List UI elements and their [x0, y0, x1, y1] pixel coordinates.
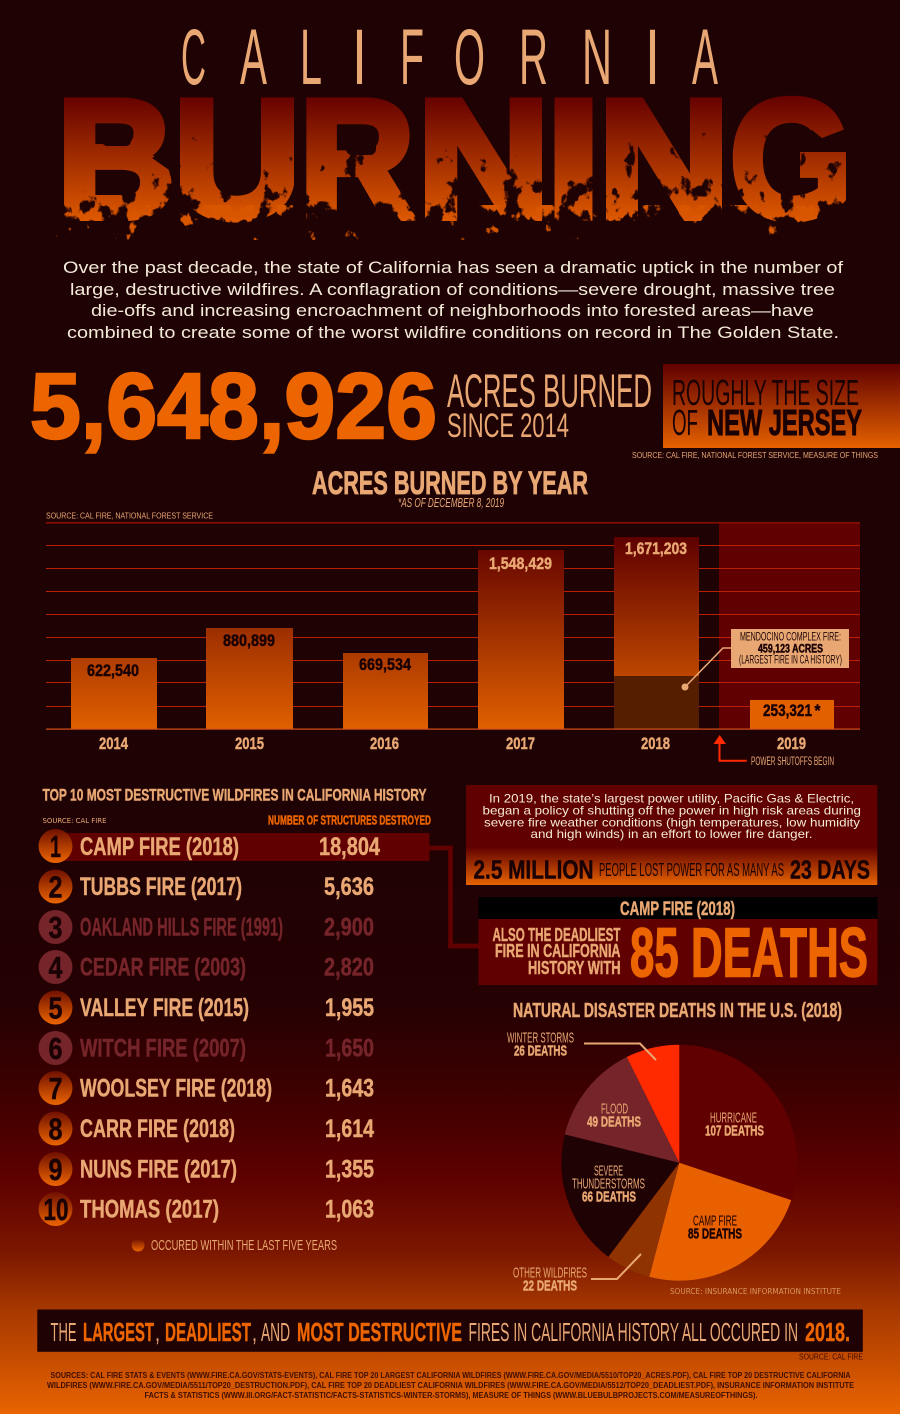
- bar chart: acres burned by year: 669,534: [359, 655, 411, 674]
- heading: acres burned by year: *AS OF DECEMBER 8, 2019: [398, 495, 504, 510]
- pie chart: natural disaster deaths: [561, 1045, 797, 1281]
- banner: largest, deadliest, most destructive: MOST DESTRUCTIVE: [297, 1317, 462, 1347]
- slice: severe thunderstorms: [561, 1134, 679, 1257]
- title: California: N: [582, 12, 612, 101]
- row 2: Tubbs Fire: 5,636: [324, 873, 374, 901]
- banner: largest, deadliest, most destructive: ,: [155, 1317, 160, 1347]
- callout: Mendocino Complex Fire: [682, 629, 849, 690]
- bar chart: acres burned by year: 1,671,203: [625, 539, 687, 558]
- bar chart: acres burned by year: 2014: [99, 734, 128, 753]
- row 8: Carr Fire: 1,614: [325, 1115, 374, 1143]
- bar chart: acres burned by year: *: [814, 701, 821, 720]
- slice: winter storms: [627, 1045, 679, 1163]
- label: winter storms: WINTER STORMS: [507, 1030, 574, 1046]
- title: California: O: [454, 12, 485, 101]
- slice: severe thunderstorms: THUNDERSTORMS: [572, 1176, 645, 1192]
- banner: largest, deadliest, most destructive: LARGEST: [83, 1317, 154, 1347]
- slice: severe thunderstorms: 66 DEATHS: [582, 1188, 636, 1206]
- label: other wildfires: OTHER WILDFIRES: [513, 1264, 587, 1282]
- sources footer: WILDFIRES (WWW.FIRE.CA.GOV/MEDIA/5511/TOP20_DESTRUCTION.PDF), CAL FIRE TOP 20 DEADLIEST CALIFORNIA WILDFIRES (WWW.FIRE.CA.GOV/MEDIA/5512/TOP20_DEADLIEST.PDF), INSURANCE INFORMATION INSTITUTE: [47, 1381, 855, 1390]
- banner: largest, deadliest, most destructive: ,: [252, 1317, 257, 1347]
- legend: occurred within last five years: [132, 1237, 337, 1254]
- column heading: structures destroyed: NUMBER OF STRUCTURES DESTROYED: [268, 814, 431, 828]
- bar chart: acres burned by year: [46, 522, 860, 753]
- title: California: R: [519, 12, 548, 101]
- row 2: Tubbs Fire: TUBBS FIRE (2017): [80, 873, 242, 901]
- panel: power shutoffs: and high winds) in an effort to lower fire danger.: [530, 827, 812, 841]
- source note: banner: SOURCE: CAL FIRE: [799, 1352, 863, 1362]
- row 10: Thomas: [38, 1192, 374, 1227]
- sources footer: [47, 1371, 855, 1400]
- headline stat: acres burned: ACRES BURNED: [447, 364, 652, 417]
- title: California: C: [181, 12, 206, 101]
- title: California: I: [645, 12, 660, 101]
- headline stat: acres burned: 5,648,926: [30, 354, 437, 458]
- banner: largest, deadliest, most destructive: THE: [50, 1317, 76, 1347]
- slice: hurricane: [679, 1045, 797, 1200]
- row 6: Witch Fire: WITCH FIRE (2007): [80, 1034, 246, 1062]
- slice: flood: FLOOD: [601, 1100, 628, 1118]
- title: California: [181, 12, 718, 101]
- bar chart: acres burned by year: 622,540: [87, 661, 139, 680]
- source note: chart: SOURCE: CAL FIRE, NATIONAL FOREST SERVICE: [46, 512, 213, 520]
- slice: flood: 49 DEATHS: [587, 1114, 641, 1130]
- row 9: Nuns Fire: 1,355: [325, 1156, 374, 1184]
- slice: camp fire: CAMP FIRE: [693, 1212, 737, 1230]
- headline stat: acres burned: [30, 354, 652, 458]
- row 5: Valley Fire: 5: [48, 990, 62, 1026]
- panel: power shutoffs: began a policy of shutting off the power in high risk areas during: [482, 804, 861, 818]
- bar chart: acres burned by year: 2018: [641, 734, 670, 753]
- heading: acres burned by year: ACRES BURNED BY YEAR: [312, 465, 588, 501]
- title: Burning: N: [598, 65, 730, 253]
- bar chart: acres burned by year: 253,321: [763, 701, 812, 720]
- panel: power shutoffs: In 2019, the state’s largest power utility, Pacific Gas & Electric,: [489, 792, 854, 806]
- label: other wildfires: [513, 1254, 641, 1294]
- row 7: Woolsey Fire: WOOLSEY FIRE (2018): [80, 1075, 272, 1103]
- sources footer: FACTS & STATISTICS (WWW.III.ORG/FACT-STATISTIC/FACTS-STATISTICS-WINTER-STORMS), MEASURE OF THINGS (WWW.BLUEBULBPROJECTS.COM/MEASUREOFTHINGS).: [144, 1391, 758, 1400]
- row 7: Woolsey Fire: [38, 1071, 374, 1106]
- row 10: Thomas: 10: [44, 1192, 68, 1227]
- row 1: Camp Fire: 18,804: [319, 833, 380, 861]
- heading: acres burned by year: [312, 465, 588, 510]
- banner: largest, deadliest, most destructive: AND: [261, 1317, 290, 1347]
- slice: other wildfires: [608, 1163, 679, 1277]
- slice: hurricane: HURRICANE: [710, 1110, 757, 1126]
- intro paragraph: large, destructive wildfires. A conflagration of conditions—severe drought, massive tree: [70, 280, 835, 299]
- row 10: Thomas: 1,063: [325, 1196, 374, 1224]
- slice: camp fire: [649, 1163, 791, 1281]
- row 8: Carr Fire: [38, 1112, 374, 1146]
- arrow: power shutoffs begin: [714, 735, 834, 768]
- banner: largest, deadliest, most destructive: DEADLIEST: [165, 1317, 251, 1347]
- source note: top 10: SOURCE: CAL FIRE: [42, 817, 106, 825]
- row 4: Cedar Fire: 2,820: [324, 954, 374, 982]
- row 1: Camp Fire: [38, 829, 430, 864]
- row 3: Oakland Hills Fire: OAKLAND HILLS FIRE (1991): [80, 914, 283, 942]
- intro paragraph: [63, 258, 843, 342]
- panel: Camp Fire deaths: [478, 897, 878, 992]
- title: California: A: [240, 12, 267, 101]
- banner: largest, deadliest, most destructive: 2018.: [805, 1317, 850, 1347]
- panel: power shutoffs: severe fire weather conditions (high temperatures, low humidity: [484, 816, 860, 830]
- row 10: Thomas: THOMAS (2017): [80, 1196, 219, 1224]
- row 1: Camp Fire: CAMP FIRE (2018): [80, 833, 239, 861]
- heading: top 10 wildfires: TOP 10 MOST DESTRUCTIVE WILDFIRES IN CALIFORNIA HISTORY: [42, 786, 427, 804]
- title: Burning: G: [730, 65, 852, 253]
- bar chart: acres burned by year: 2017: [506, 734, 535, 753]
- callout: roughly the size of New Jersey: [663, 364, 900, 448]
- row 6: Witch Fire: [38, 1031, 374, 1066]
- text: A: [692, 12, 718, 101]
- slice: hurricane: 107 DEATHS: [705, 1122, 764, 1140]
- row 9: Nuns Fire: 9: [48, 1152, 62, 1187]
- panel: power shutoffs: [466, 785, 877, 885]
- row 4: Cedar Fire: 4: [48, 950, 63, 985]
- row 2: Tubbs Fire: 2: [48, 870, 62, 904]
- row 5: Valley Fire: 1,955: [325, 994, 374, 1022]
- slice: severe thunderstorms: SEVERE: [594, 1162, 623, 1180]
- legend: occurred within last five years: OCCURED WITHIN THE LAST FIVE YEARS: [151, 1237, 337, 1254]
- row 3: Oakland Hills Fire: 2,900: [324, 914, 374, 942]
- panel: Camp Fire deaths: FIRE IN CALIFORNIA: [495, 941, 620, 961]
- row 4: Cedar Fire: CEDAR FIRE (2003): [80, 954, 246, 982]
- row 8: Carr Fire: 8: [48, 1112, 62, 1146]
- panel: Camp Fire deaths: CAMP FIRE (2018): [620, 899, 735, 920]
- row 3: Oakland Hills Fire: 3: [48, 910, 62, 945]
- row 6: Witch Fire: 6: [48, 1031, 62, 1066]
- row 4: Cedar Fire: [38, 950, 374, 985]
- title: Burning: R: [300, 65, 414, 253]
- title: Burning: I: [546, 65, 601, 253]
- title: California: I: [352, 12, 367, 101]
- callout: roughly the size of New Jersey: OF: [672, 402, 698, 443]
- panel: power shutoffs: 23 DAYS: [790, 854, 870, 884]
- title: Burning: U: [172, 65, 302, 253]
- panel: power shutoffs: 2.5 MILLION: [474, 854, 594, 884]
- label: other wildfires: 22 DEATHS: [523, 1278, 577, 1294]
- ranked list: top 10 wildfires: [38, 829, 430, 1227]
- intro paragraph: combined to create some of the worst wildfire conditions on record in The Golden State.: [67, 323, 839, 342]
- connector: Camp Fire row to deaths panel: [429, 848, 479, 946]
- title: California: L: [300, 12, 322, 101]
- row 2: Tubbs Fire: [38, 870, 374, 904]
- row 1: Camp Fire: 1: [50, 829, 61, 864]
- row 7: Woolsey Fire: 1,643: [325, 1075, 374, 1103]
- row 5: Valley Fire: VALLEY FIRE (2015): [80, 994, 249, 1022]
- bar chart: acres burned by year: 2015: [235, 734, 264, 753]
- title: Burning: B: [57, 65, 175, 253]
- bar chart: acres burned by year: 1,548,429: [489, 554, 552, 573]
- arrow: power shutoffs begin: POWER SHUTOFFS BEGIN: [751, 756, 834, 768]
- panel: Camp Fire deaths: ALSO THE DEADLIEST: [492, 925, 620, 945]
- banner: largest, deadliest, most destructive: [37, 1310, 863, 1352]
- bar chart: acres burned by year: 880,899: [223, 631, 275, 650]
- row 6: Witch Fire: 1,650: [325, 1034, 374, 1062]
- row 8: Carr Fire: CARR FIRE (2018): [80, 1115, 235, 1143]
- callout: Mendocino Complex Fire: MENDOCINO COMPLEX FIRE:: [740, 632, 841, 644]
- intro paragraph: Over the past decade, the state of California has seen a dramatic uptick in the number of: [63, 258, 843, 277]
- row 9: Nuns Fire: [38, 1152, 374, 1187]
- title: Burning: N: [417, 65, 550, 253]
- bar chart: acres burned by year: 2019: [777, 734, 806, 753]
- label: winter storms: [507, 1030, 656, 1060]
- slice: camp fire: 85 DEATHS: [688, 1226, 742, 1242]
- slice: flood: [565, 1057, 679, 1163]
- source note: pie chart: SOURCE: INSURANCE INFORMATION INSTITUTE: [670, 1287, 841, 1296]
- label: winter storms: 26 DEATHS: [514, 1042, 567, 1060]
- title: Burning: [56, 96, 846, 240]
- row 9: Nuns Fire: NUNS FIRE (2017): [80, 1156, 237, 1184]
- bar chart: acres burned by year: 2016: [370, 734, 399, 753]
- title: California: F: [400, 12, 424, 101]
- row 3: Oakland Hills Fire: [38, 910, 374, 945]
- row 5: Valley Fire: [38, 990, 374, 1026]
- row 7: Woolsey Fire: 7: [48, 1071, 62, 1106]
- headline stat: acres burned: SINCE 2014: [447, 407, 569, 445]
- callout: Mendocino Complex Fire: 459,123 ACRES: [758, 644, 823, 656]
- intro paragraph: die-offs and increasing encroachment of neighborhoods into forested areas—have: [91, 301, 814, 320]
- panel: Camp Fire deaths: HISTORY WITH: [528, 958, 620, 978]
